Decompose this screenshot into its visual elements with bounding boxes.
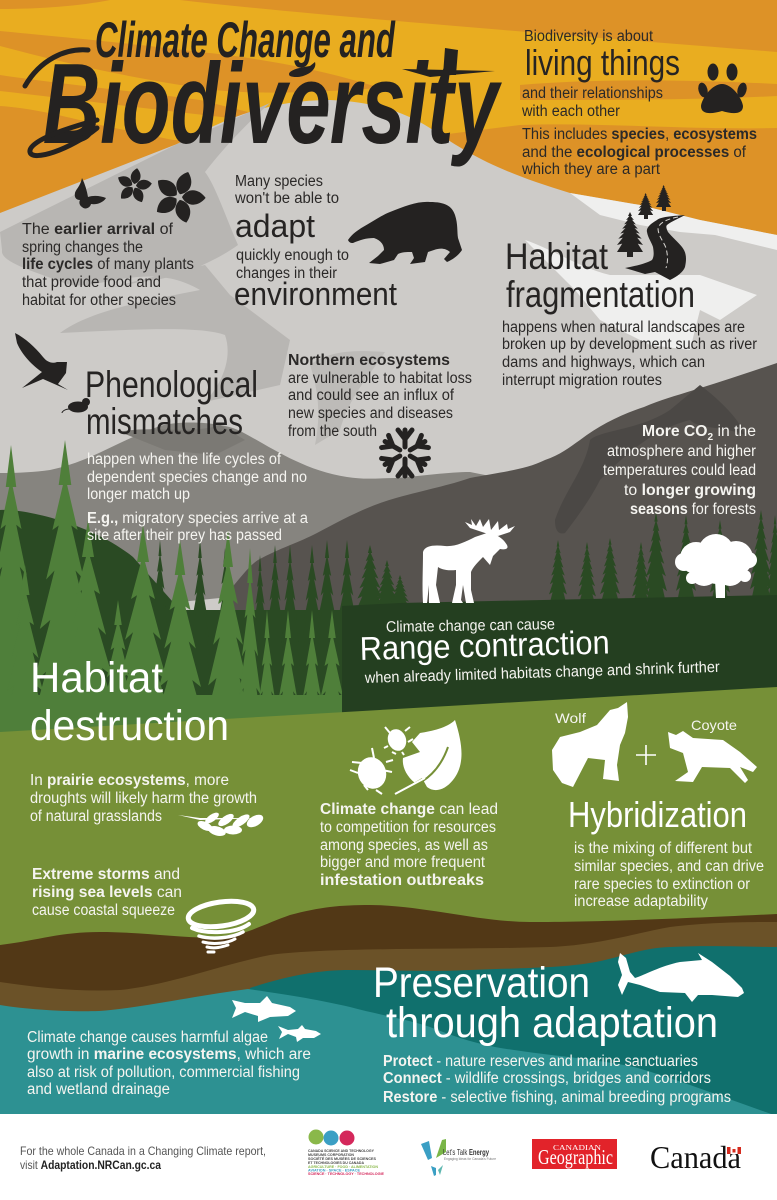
label: coyote: Coyote	[691, 717, 737, 733]
text: protect connect restore	[383, 1053, 731, 1106]
icon: large flower	[153, 169, 206, 225]
text: earlier arrival of spring: habitat for other species	[22, 292, 176, 309]
heading: hybridization: Hybridization	[568, 794, 747, 835]
icon: paw	[697, 64, 748, 113]
logo: Let's Talk Energy	[421, 1139, 496, 1176]
text: mismatch description	[87, 451, 308, 544]
text: protect connect restore: Restore - selective fishing, animal breeding programs	[383, 1089, 731, 1106]
text: infestation: to competition for resources	[320, 819, 496, 836]
background: mid grey mountain	[0, 423, 600, 620]
footer text: For the whole Canada in a Changing Climate report,	[20, 1144, 266, 1158]
heading: habitat fragmentation: Habitat	[505, 236, 609, 277]
text: infestation: bigger and more frequent	[320, 854, 486, 871]
text: earlier arrival of spring: spring changes the	[22, 239, 143, 256]
heading: phenological mismatches: Phenological	[85, 364, 258, 405]
text: protect connect restore: Connect - wildlife crossings, bridges and corridors	[383, 1070, 711, 1087]
icon: small flower	[116, 167, 153, 204]
background: dark soil	[0, 890, 777, 1020]
text: extreme storms: Extreme storms and	[32, 866, 180, 883]
logo: Canada wordmark: Canada	[650, 1139, 741, 1175]
text: hybridization description: similar species, and can drive	[574, 858, 764, 875]
heading: habitat destruction	[30, 654, 229, 750]
text: more CO2: 2	[708, 432, 714, 443]
title t crossbar and g tail	[289, 48, 495, 77]
text: prairie ecosystems: In prairie ecosystems, more	[30, 772, 229, 789]
text: marine ecosystems: Climate change causes harmful algae	[27, 1029, 268, 1046]
logo: Let's Talk Energy: Engaging Ideas for Canada's Future	[444, 1157, 496, 1161]
icon: owl	[15, 333, 68, 390]
text: biodiversity intro: with each other	[521, 103, 620, 120]
text: earlier arrival of spring: The earlier arrival of	[22, 221, 174, 238]
icon: whale	[618, 953, 744, 1002]
background: light soil	[0, 922, 777, 1020]
text: mismatch description: site after their prey has passed	[87, 527, 282, 544]
heading: adapt: adapt	[235, 208, 315, 244]
text: earlier arrival of spring: that provide food and	[22, 274, 161, 291]
text: species adapt: changes in their	[236, 265, 337, 282]
icon: butterfly	[75, 178, 106, 208]
title word: Biodiversity: Biodiversity	[43, 40, 502, 167]
text: more CO2: seasons for forests	[630, 501, 756, 518]
text: marine ecosystems: also at risk of pollution, commercial fishing	[27, 1064, 300, 1081]
icon: trees and road	[617, 185, 686, 280]
text: fragmentation description: interrupt migration routes	[502, 372, 662, 389]
icon: wolf	[552, 702, 628, 787]
text: northern ecosystems: are vulnerable to habitat loss	[288, 370, 472, 387]
icon: mouse	[62, 398, 90, 413]
icon: wheat	[178, 811, 265, 838]
background: light green foreground forest	[0, 440, 357, 900]
logo: science and technology museums: AVIATION · SPACE · ESPACE	[308, 1168, 361, 1172]
text: earlier arrival of spring	[22, 221, 194, 309]
logo: Canadian Geographic: CANADIAN	[553, 1144, 601, 1152]
logo: science and technology museums: AGRICULTURE · FOOD · ALIMENTATION	[308, 1165, 378, 1169]
panel: range contraction band	[342, 595, 777, 716]
text: more CO2: in the	[713, 423, 756, 440]
background: grey snow-capped mountain	[0, 100, 777, 620]
text: fragmentation description	[502, 319, 757, 389]
heading: preservation through adaptation: Preservation	[373, 959, 590, 1007]
text: mismatch description: dependent species change and no	[87, 469, 307, 486]
background: orange sky	[0, 0, 777, 620]
text: northern ecosystems: Northern ecosystems	[288, 352, 450, 369]
text: marine ecosystems	[27, 1029, 311, 1098]
icon: plus	[636, 745, 656, 765]
heading: habitat destruction: Habitat	[30, 654, 163, 702]
text: extreme storms	[32, 866, 182, 919]
text: infestation: Climate change can lead	[320, 801, 498, 818]
logo: science and technology museums: CANADA SCIENCE AND TECHNOLOGY	[308, 1149, 375, 1153]
text: fragmentation description: happens when natural landscapes are	[502, 319, 745, 336]
text: extreme storms: cause coastal squeeze	[32, 902, 175, 919]
text: infestation: infestation outbreaks	[320, 872, 484, 889]
text: relationships: and their relationships	[522, 85, 663, 102]
heading: habitat destruction: destruction	[30, 702, 229, 750]
text: marine ecosystems: growth in marine ecosystems, which are	[27, 1046, 311, 1063]
text: mismatch description: happen when the life cycles of	[87, 451, 282, 468]
text: hybridization description: is the mixing of different but	[574, 840, 753, 857]
icon: moose	[423, 519, 515, 603]
title swash strokes	[25, 50, 97, 156]
icon: polar bear	[348, 202, 462, 264]
text: northern ecosystems: new species and diseases	[288, 405, 453, 422]
icon: ticks and leaf	[350, 720, 462, 794]
text: species adapt: Many species	[235, 173, 323, 190]
heading: living things: living things	[525, 42, 680, 83]
title	[25, 12, 502, 167]
text: more CO2	[603, 423, 756, 518]
background: dark teal water	[250, 946, 777, 1116]
logo: science and technology museums: SCIENCE · TECHNOLOGY · TECHNOLOGIE	[308, 1172, 385, 1176]
text: species adapt	[234, 173, 397, 312]
heading: preservation through adaptation	[373, 959, 718, 1047]
text: more CO2: temperatures could lead	[603, 462, 756, 479]
heading: habitat fragmentation	[505, 236, 695, 315]
text: hybridization description: rare species to extinction or	[574, 876, 750, 893]
icon: white tree	[675, 534, 757, 598]
text: prairie ecosystems	[30, 772, 257, 825]
text: species adapt: quickly enough to	[236, 247, 349, 264]
footer text: visit Adaptation.NRCan.gc.ca	[20, 1158, 161, 1172]
text: mismatch description: longer match up	[87, 486, 190, 503]
text: fragmentation description: broken up by development such as river	[502, 336, 757, 353]
text: prairie ecosystems: droughts will likely harm the growth	[30, 790, 257, 807]
heading: preservation through adaptation: through adaptation	[386, 999, 718, 1047]
icon: snowflake	[382, 430, 428, 476]
background: dark forest	[0, 510, 777, 760]
range text intro: Climate change can cause	[386, 616, 555, 636]
heading: phenological mismatches	[85, 364, 258, 442]
text: northern ecosystems: from the south	[288, 423, 377, 440]
background: light teal water	[0, 989, 777, 1116]
text: more CO2: More CO	[642, 423, 708, 440]
logo: science and technology museums	[308, 1130, 385, 1176]
text: biodiversity intro: This includes species, ecosystems	[522, 126, 757, 143]
label: wolf: Wolf	[555, 710, 586, 726]
footer background	[0, 1114, 777, 1200]
heading: habitat fragmentation: fragmentation	[506, 274, 695, 315]
text: hybridization description	[574, 840, 764, 910]
text: northern ecosystems	[288, 352, 472, 440]
text: more CO2: atmosphere and higher	[607, 443, 756, 460]
footer text	[20, 1144, 266, 1172]
text: protect connect restore: Protect - nature reserves and marine sanctuaries	[383, 1053, 698, 1070]
text: prairie ecosystems: of natural grasslands	[30, 808, 162, 825]
text: mismatch description: E.g., migratory species arrive at a	[87, 510, 308, 527]
text: more CO2: to longer growing	[624, 482, 756, 499]
text: northern ecosystems: and could see an influx of	[288, 387, 455, 404]
text: marine ecosystems: and wetland drainage	[27, 1081, 170, 1098]
logo: Let's Talk Energy: Let's Talk Energy	[443, 1148, 489, 1157]
text: biodiversity intro	[521, 28, 757, 178]
text: biodiversity intro: and the ecological processes of	[522, 144, 747, 161]
text: earlier arrival of spring: life cycles of many plants	[22, 256, 194, 273]
icon: tornado	[187, 898, 255, 952]
background: dark grey mountain	[230, 363, 777, 620]
text: infestation: among species, as well as	[320, 837, 488, 854]
text: infestation	[320, 801, 498, 889]
icon: coyote	[668, 731, 757, 783]
text: species adapt: won't be able to	[234, 190, 339, 207]
icon: large fish	[232, 996, 296, 1022]
text: extreme storms: rising sea levels can	[32, 884, 182, 901]
range text description: when already limited habitats change and shrink further	[364, 659, 720, 687]
logo: science and technology museums: SOCIÉTÉ DES MUSÉES DE SCIENCES	[308, 1156, 377, 1161]
text: biodiversity intro: which they are a part	[521, 161, 661, 178]
heading: range contraction: Range contraction	[359, 623, 610, 667]
heading: phenological mismatches: mismatches	[86, 401, 243, 442]
text: biodiversity intro: Biodiversity is about	[524, 28, 654, 45]
logo: Canadian Geographic: Geographic	[538, 1145, 613, 1169]
text: fragmentation description: dams and highways, which can	[502, 354, 705, 371]
icon: small fish	[278, 1025, 321, 1042]
logo: science and technology museums: ET TECHNOLOGIES DU CANADA	[308, 1161, 364, 1165]
logo: science and technology museums: MUSEUMS CORPORATION	[308, 1153, 354, 1157]
logo: Canadian Geographic	[532, 1139, 617, 1169]
heading: environment: environment	[234, 276, 397, 312]
title line: Climate Change and: Climate Change and	[95, 12, 396, 68]
text: hybridization description: increase adaptability	[574, 893, 708, 910]
background: olive prairie	[0, 687, 777, 945]
